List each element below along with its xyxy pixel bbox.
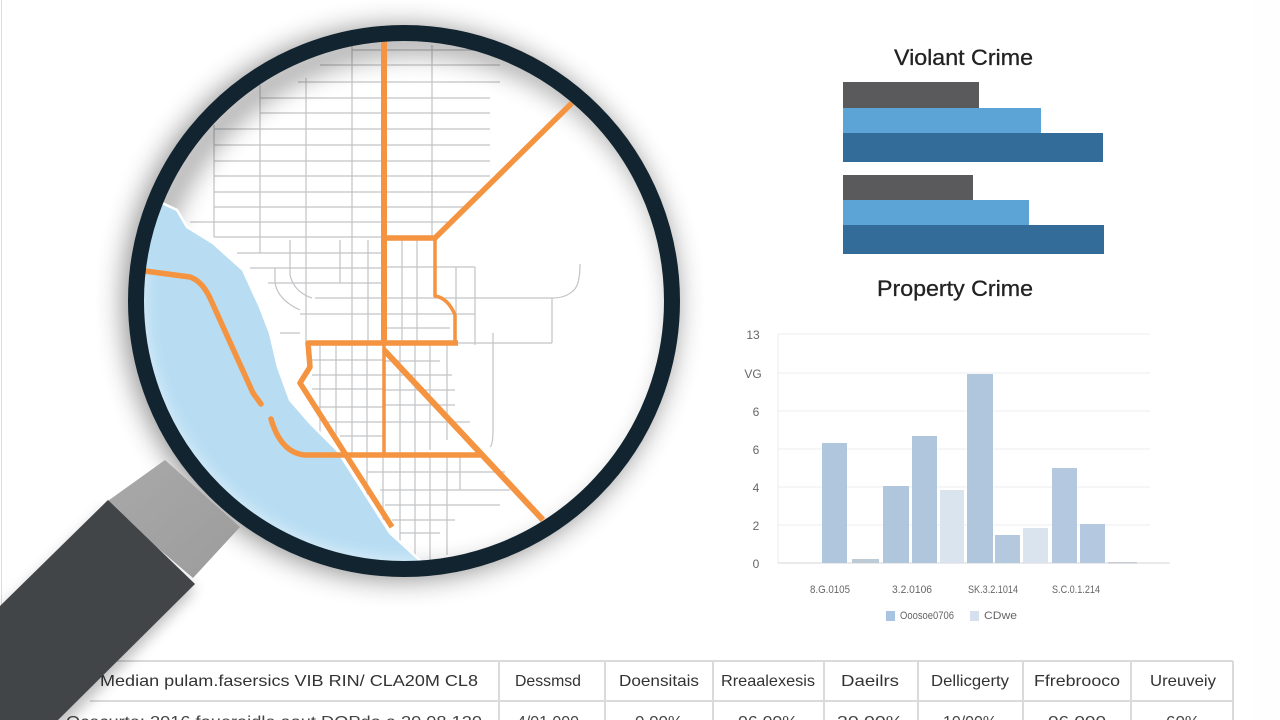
column chart [744, 328, 1170, 622]
chart legend [886, 610, 1017, 622]
table data row [66, 714, 1200, 720]
street map [144, 41, 664, 561]
y axis labels: 2 [753, 519, 760, 533]
table header row: Ffrebrooco [1034, 673, 1120, 690]
y axis labels: VG [744, 367, 762, 381]
y axis labels: 6 [753, 405, 760, 419]
panel: violent and property crime bars [843, 45, 1104, 301]
lens ring [136, 33, 672, 569]
heading: Violent Crime: Violant Crime [894, 45, 1033, 70]
y axis labels [744, 328, 762, 571]
chart legend: Ooosoe0706 [900, 610, 954, 622]
bar group 2 [843, 175, 1104, 254]
lens inner shadow [164, 41, 664, 560]
chart legend: CDwe [984, 610, 1017, 622]
table header row: Daeilrs [841, 673, 899, 690]
table header row [100, 673, 1216, 690]
orange highways [145, 42, 572, 527]
x axis labels: 3.2.0106 [892, 584, 932, 596]
bar group 1 [843, 82, 1103, 162]
data table [66, 661, 1233, 720]
table header row: Median pulam.fasersics VIB RIN/ CLA20M CL8 [100, 673, 478, 690]
x axis labels: S.C.0.1.214 [1052, 584, 1100, 596]
y axis labels: 13 [746, 328, 760, 342]
y axis labels: 6 [753, 443, 760, 457]
x axis labels [810, 584, 1100, 596]
x axis labels: SK.3.2.1014 [968, 584, 1018, 596]
table header row: Ureuveiy [1150, 673, 1216, 690]
table header row: Doensitais [619, 673, 699, 690]
table header row: Rreaalexesis [721, 673, 815, 690]
lens drop shadow [124, 27, 676, 579]
water body [144, 202, 422, 561]
magnifying glass [0, 27, 684, 720]
lens face [140, 37, 668, 565]
x axis labels: 8.G.0105 [810, 584, 850, 596]
heading: Property Crime: Property Crime [877, 276, 1033, 301]
table header row: Dessmsd [515, 673, 581, 690]
y axis labels: 0 [753, 557, 760, 571]
chart columns [822, 374, 1137, 564]
y axis labels: 4 [753, 481, 760, 495]
magnifier handle [0, 460, 240, 720]
table header row: Dellicgerty [931, 673, 1009, 690]
water edge glow [138, 270, 420, 566]
street grid [190, 42, 580, 560]
